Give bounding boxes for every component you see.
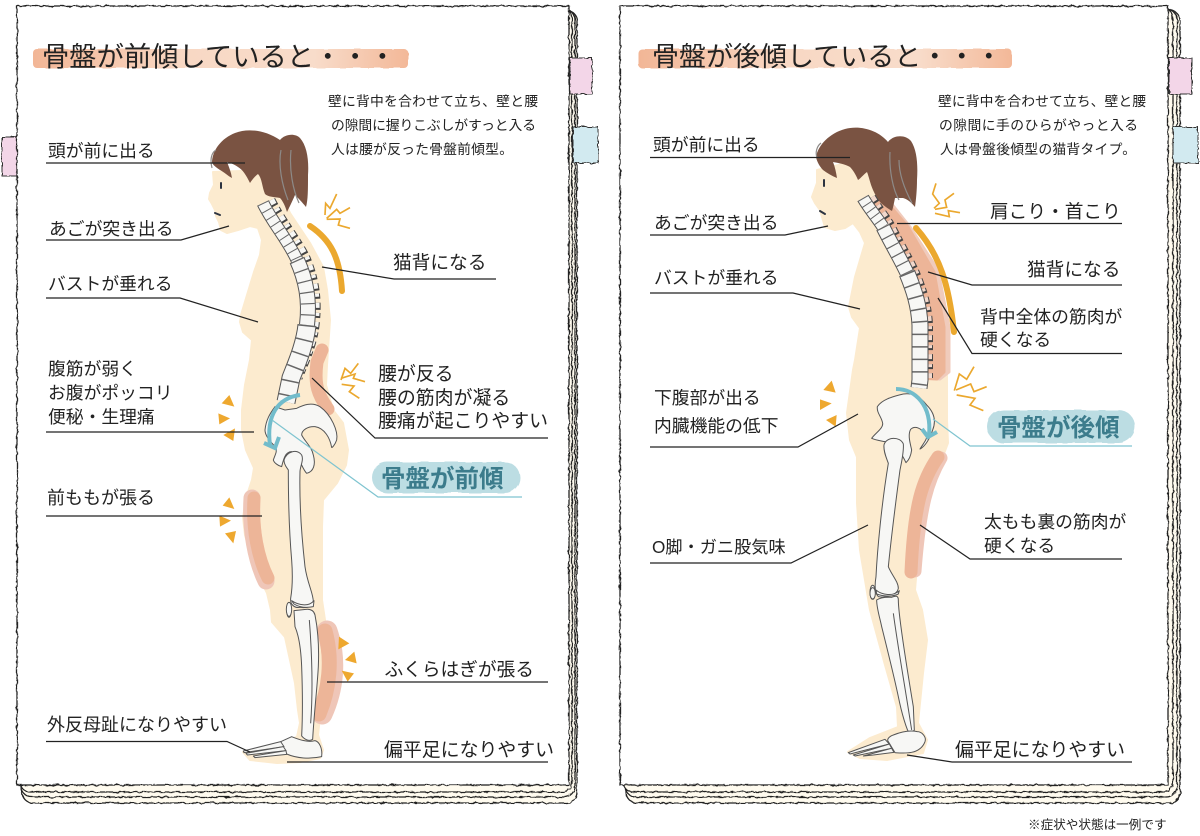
panel: pelvis tilted backward: [620, 6, 1198, 803]
label: lower back: [312, 363, 548, 438]
figure: eye and mouth: [820, 180, 825, 214]
label: lower abdomen: 下腹部が出る: [654, 388, 761, 408]
footnote: ※症状や状態は一例です: [1028, 818, 1167, 832]
label: flat foot: 偏平足になりやすい: [384, 739, 554, 761]
label: rounded back: [928, 259, 1122, 285]
label: bow legs: O脚・ガニ股気味: [652, 537, 786, 557]
text block: how to check: の隙間に握りこぶしがすっと入る: [331, 114, 536, 134]
label: bow legs: [650, 525, 868, 563]
muscle: back thigh: [911, 457, 941, 572]
figure: eye and mouth: [215, 183, 221, 215]
text block: how to check: の隙間に手のひらがやっと入る: [939, 114, 1138, 134]
figure: hair: [816, 128, 917, 211]
label: rounded back: 猫背になる: [1027, 259, 1120, 280]
heading: highlight and title: 骨盤が前傾していると・・・: [42, 41, 396, 72]
label: stiff shoulders: 肩こり・首こり: [990, 201, 1121, 222]
label: back muscles: 背中全体の筋肉が: [980, 307, 1122, 327]
label: pelvis tilted backward: 骨盤が後傾: [997, 413, 1120, 442]
icon: tension triangles: [820, 381, 837, 427]
skeleton: spine: [263, 200, 316, 402]
label: pelvis tilted forward: 骨盤が前傾: [381, 464, 504, 493]
tab: left pink: [2, 137, 22, 176]
label: back thigh: 硬くなる: [984, 536, 1055, 556]
label: back muscles: [938, 298, 1122, 354]
skeleton: pelvis and femur: [265, 404, 337, 617]
label: chin: あごが突き出る: [49, 219, 173, 239]
text block: how to check: 壁に背中を合わせて立ち、壁と腰: [938, 90, 1146, 110]
icon: rounded back arc: [916, 228, 954, 332]
label: front thigh: 前ももが張る: [47, 488, 155, 508]
text block: how to check: [328, 90, 538, 158]
muscle: lower back: [316, 350, 328, 409]
label: bunion: [46, 715, 250, 752]
icon: calf tension triangles: [338, 637, 357, 682]
icon: pain spark shoulder: [933, 183, 960, 217]
label: flat foot: [907, 739, 1132, 762]
label: flat foot: 偏平足になりやすい: [955, 739, 1125, 761]
figure: body silhouette: [812, 160, 948, 760]
text block: how to check: [938, 90, 1146, 158]
muscle: whole back: [870, 198, 949, 379]
label: bust: [46, 274, 258, 322]
label: bust: バストが垂れる: [654, 268, 778, 288]
label: lower back: 腰痛が起こりやすい: [378, 410, 548, 432]
paper stack: [620, 6, 1180, 803]
label: abdomen: [46, 359, 254, 432]
heading: highlight and title: 骨盤が後傾していると・・・: [652, 42, 1002, 72]
label: lower back: 腰の筋肉が凝る: [378, 387, 510, 409]
skeleton: lower leg and foot: [243, 601, 322, 758]
label: rounded back: 猫背になる: [393, 252, 486, 273]
label: pelvis tilted backward: [933, 410, 1135, 446]
label: abdomen: 便秘・生理痛: [48, 407, 155, 427]
label: back thigh: 太もも裏の筋肉が: [984, 512, 1126, 532]
icon: pain spark lower back: [341, 363, 365, 398]
icon: pain spark lower back: [954, 367, 987, 411]
text block: how to check: 壁に背中を合わせて立ち、壁と腰: [328, 90, 538, 110]
label: back thigh: [920, 512, 1126, 559]
icon: tension triangles: [218, 395, 236, 543]
label: back muscles: 硬くなる: [980, 330, 1051, 350]
muscle: thigh front: [252, 498, 268, 581]
figure: body silhouette: [209, 170, 348, 763]
label: lower abdomen: 内臓機能の低下: [654, 416, 778, 436]
label: bust: [650, 268, 860, 309]
text block: how to check: 人は骨盤後傾型の猫背タイプ。: [940, 138, 1136, 158]
skeleton: pelvis and femur: [870, 394, 934, 599]
skeleton: spine: [863, 197, 929, 388]
arrow: pelvis tilt direction: [896, 389, 937, 437]
label: lower back: 腰が反る: [378, 363, 454, 385]
paper stack: [17, 6, 577, 803]
panel: pelvis tilted forward: [2, 6, 598, 803]
label: bunion: 外反母趾になりやすい: [47, 715, 227, 735]
figure: hair: [211, 130, 308, 212]
label: calf: ふくらはぎが張る: [384, 659, 534, 680]
label: rounded back: [322, 252, 496, 279]
tabs over the paper edge: [1169, 58, 1198, 163]
label: abdomen: お腹がポッコリ: [48, 383, 172, 403]
label: chin: あごが突き出る: [654, 213, 778, 233]
label: abdomen: 腹筋が弱く: [48, 359, 137, 379]
tabs over the paper edge: [570, 58, 598, 163]
label: lower abdomen: [650, 388, 858, 447]
label: head forward: 頭が前に出る: [48, 141, 155, 161]
icon: pain spark upper back: [325, 194, 350, 228]
muscle: calf: [319, 631, 333, 714]
text block: how to check: 人は腰が反った骨盤前傾型。: [331, 138, 513, 158]
icon: rounded back arc: [310, 226, 342, 291]
skeleton: lower leg and foot: [848, 588, 925, 756]
label: chin: [650, 213, 828, 235]
label: pelvis tilted forward: [272, 420, 522, 497]
label: bust: バストが垂れる: [48, 274, 172, 294]
label: head forward: 頭が前に出る: [653, 135, 760, 155]
label: chin: [46, 219, 229, 240]
arrow: pelvis tilt direction: [264, 395, 300, 448]
